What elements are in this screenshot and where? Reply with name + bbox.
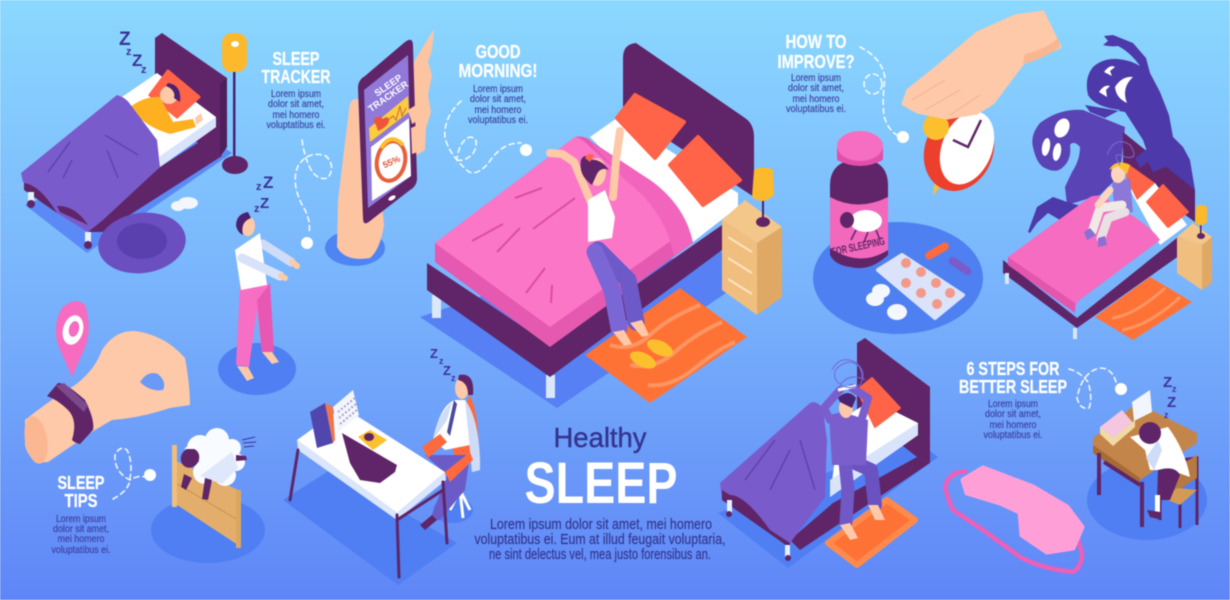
heading: sleep tracker [262, 49, 330, 87]
title: sleep: SLEEP [524, 451, 678, 516]
sleep z letters: Z [430, 346, 438, 361]
text block: sleep tips body: Lorem ipsum [56, 513, 106, 525]
heading: six steps: 6 STEPS FOR [966, 359, 1060, 379]
books and paper [1100, 390, 1152, 446]
sleep z letters: Z [260, 195, 269, 212]
illustration: shadow monsters over small bed [1003, 35, 1195, 339]
text block: how to improve body: voluptatibus ei. [786, 103, 846, 115]
text block: how to improve body: mei homero [792, 93, 840, 105]
small rug and nightstand [1095, 205, 1212, 340]
illustration: woman stretching on big bed [420, 43, 754, 408]
chair [1160, 455, 1197, 528]
sleep z letters: Z [119, 29, 131, 50]
text block: sleep tracker body: dolor sit amet, [268, 98, 324, 110]
illustration: sheep jumping fence [151, 428, 265, 563]
sleep z letters [1163, 374, 1177, 420]
sleep z letters: Z [443, 363, 451, 378]
text block: how to improve body: dolor sit amet, [788, 82, 844, 94]
text block: sleep tips body [52, 513, 110, 556]
left monster [1032, 110, 1125, 205]
text block: how to improve body [786, 72, 846, 115]
top monster hand [1135, 142, 1175, 172]
heading: sleep tracker: TRACKER [262, 67, 330, 87]
sleep z letters [119, 29, 147, 76]
illustration: student asleep at desk [1087, 374, 1207, 540]
sleep z letters: Z [132, 51, 142, 70]
heading: sleep tips: SLEEP [58, 473, 104, 493]
text block: sleep tips body: dolor sit amet, [53, 523, 109, 535]
books [310, 403, 333, 448]
illustration: pills and sleeping bottle [813, 131, 983, 334]
monster eyes [1040, 66, 1133, 162]
sleep z letters: z [126, 46, 132, 58]
student [1130, 422, 1190, 520]
sleep z letters: Z [1167, 394, 1176, 411]
dashed connector: sleep tips [113, 448, 156, 499]
sleep z letters: z [256, 181, 262, 193]
bottle [830, 131, 888, 268]
sleep z letters: Z [263, 173, 273, 192]
illustration: sleeping person in bed [21, 29, 232, 253]
sleep z letters: Z [1163, 374, 1172, 391]
heading: how to improve: HOW TO [786, 32, 846, 52]
heading: sleep tips [58, 473, 104, 511]
sleep z letters: z [451, 373, 456, 383]
dashed connector: good morning [445, 101, 532, 173]
text block: six steps body: Lorem ipsum [988, 398, 1038, 410]
man in pajamas [824, 386, 885, 540]
heading: sleep tips: TIPS [64, 491, 98, 511]
heading: six steps: BETTER SLEEP [959, 377, 1067, 397]
icon: round rug [94, 207, 190, 279]
text block: six steps body: voluptatibus ei. [984, 429, 1042, 441]
woman figure [550, 131, 649, 346]
text block: six steps body: dolor sit amet, [985, 408, 1041, 420]
text block: sleep tracker body [266, 88, 326, 131]
calendar [333, 390, 359, 432]
heading: six steps [959, 359, 1067, 397]
text block: six steps body: mei homero [990, 419, 1037, 431]
text block: sleep tracker body: mei homero [272, 109, 320, 121]
text block: sleep tracker body: voluptatibus ei. [266, 119, 326, 131]
illustration: sleep mask [945, 468, 1082, 572]
text block: sleep tips body: voluptatibus ei. [52, 544, 110, 556]
heading: how to improve [778, 32, 854, 72]
illustration: nightstand and table lamp [722, 168, 782, 315]
sleep z letters: z [1172, 384, 1177, 394]
phone screen: tracker panel [366, 72, 411, 201]
text block: main description: Lorem ipsum dolor sit amet, mei homero [490, 517, 712, 533]
illustration: hand with fitness band [21, 331, 190, 466]
text block: good morning body: mei homero [474, 104, 522, 116]
text block: main description: ne sint delectus vel, mea justo forensibus an. [489, 547, 711, 563]
sleep z letters: z [141, 64, 147, 76]
capsules [924, 241, 973, 277]
sheep [177, 428, 256, 500]
illustration: sleepwalking person [218, 173, 297, 395]
illustration: alarm clock with hand [903, 12, 1060, 202]
mouse pad [358, 430, 387, 450]
phone screen: tracker panel: SLEEP [373, 72, 405, 99]
text block: how to improve body: Lorem ipsum [791, 72, 841, 84]
heading: good morning: GOOD [476, 42, 520, 62]
text block: good morning body: voluptatibus ei. [468, 114, 528, 126]
wristband [47, 383, 93, 444]
text block: sleep tips body: mei homero [58, 533, 105, 545]
icon: map pin with heart [56, 301, 89, 377]
dashed connector: how to improve [860, 47, 909, 143]
text block: main description [474, 517, 726, 563]
title: healthy: Healthy [554, 422, 646, 453]
icon: white slippers [171, 197, 198, 211]
text block: six steps body [984, 398, 1042, 441]
orange bedside mat [828, 500, 915, 565]
laptop [342, 433, 397, 483]
bottle: FOR SLEEPING [831, 236, 886, 259]
heading: how to improve: IMPROVE? [778, 52, 854, 72]
seated woman [1084, 142, 1134, 247]
phone screen: tracker panel: 55% [381, 154, 402, 170]
heading: good morning: MORNING! [458, 61, 538, 81]
text block: good morning body: Lorem ipsum [473, 83, 523, 95]
bed [1003, 132, 1195, 339]
heading: good morning [458, 42, 538, 81]
illustration: man asleep at desk [283, 346, 480, 585]
blister pack [878, 255, 963, 318]
sleep z letters: z [1164, 410, 1169, 420]
desk [1093, 403, 1197, 527]
illustration: hand holding phone [325, 29, 434, 266]
heading: sleep tracker: SLEEP [272, 49, 320, 69]
text block: good morning body [468, 83, 528, 126]
fence [172, 445, 241, 548]
orange rug [585, 288, 747, 403]
top monster [1028, 35, 1195, 233]
yellow slippers [627, 336, 676, 372]
phone screen: tracker panel: TRACKER [366, 79, 411, 115]
loose pills [866, 284, 907, 320]
sleep z letters [254, 173, 273, 215]
text block: sleep tracker body: Lorem ipsum [271, 88, 321, 100]
icon: floor lamp [222, 33, 248, 174]
desk [290, 390, 447, 577]
dashed connector: six steps [1069, 368, 1127, 408]
man and chair [420, 375, 480, 530]
sleep z letters [430, 346, 456, 383]
text block: main description: voluptatibus ei. Eum at illud feugait voluptaria, [474, 532, 726, 548]
text block: good morning body: dolor sit amet, [470, 93, 526, 105]
dashed connector: sleep tracker [295, 140, 332, 249]
sleep z letters: z [254, 203, 260, 215]
illustration: man waking with headache [718, 338, 938, 568]
scribble above head [832, 360, 865, 388]
sleep z letters: z [439, 356, 444, 366]
